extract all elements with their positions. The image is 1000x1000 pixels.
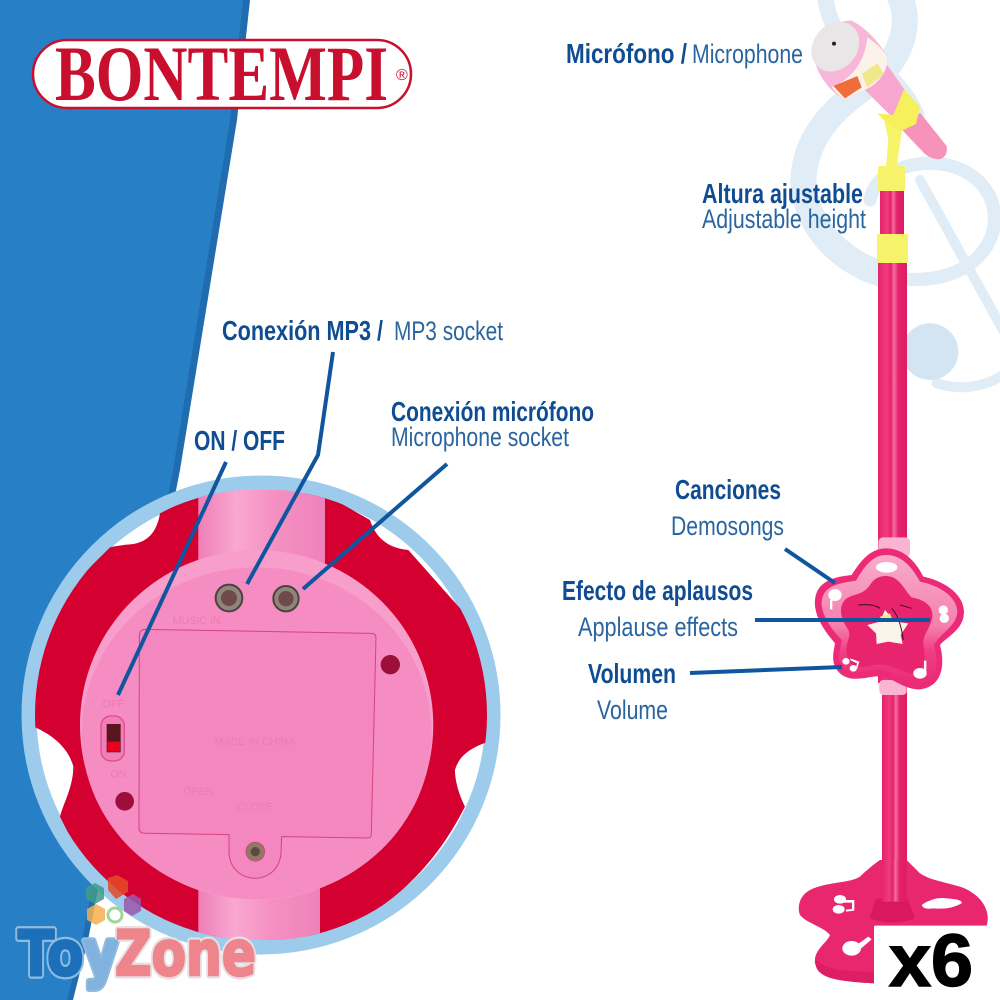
wordmark outline: Zone	[115, 917, 256, 990]
moulded marks: CLOSE	[237, 802, 273, 814]
callout: microphone	[566, 38, 803, 69]
callout: ON / OFF	[118, 425, 285, 695]
badge: x6: x6	[889, 919, 973, 1000]
head	[813, 21, 887, 99]
holder arm	[884, 118, 902, 167]
wordmark outline	[18, 917, 256, 990]
base shape	[799, 860, 988, 983]
moulded marks: MUSIC IN	[173, 615, 221, 627]
battery cover	[139, 629, 376, 878]
pole socket	[870, 897, 915, 922]
upper pole	[880, 188, 904, 236]
inset: product back	[20, 490, 500, 940]
yellow clip	[877, 89, 920, 131]
callout: volume	[588, 658, 842, 725]
lower pole	[878, 263, 907, 683]
callout: microphone socket	[303, 396, 594, 589]
callout: microphone socket: Microphone socket	[391, 422, 569, 452]
logo: Bontempi: BONTEMPI	[55, 30, 388, 117]
tab screw	[246, 842, 265, 861]
callout: microphone socket: Conexión micrófono	[391, 396, 594, 427]
background treble clef	[803, 0, 1000, 387]
callout: adjustable height: Adjustable height	[702, 204, 866, 234]
star ring	[822, 555, 957, 683]
mesh	[801, 12, 869, 81]
neck	[863, 63, 908, 117]
base note icons	[833, 895, 962, 956]
callout: MP3 socket	[222, 315, 503, 584]
star outer	[815, 548, 964, 689]
callout: applause effects: Applause effects	[578, 612, 738, 642]
label	[832, 37, 887, 99]
top cylinder	[198, 490, 325, 567]
callout: applause effects	[562, 575, 930, 642]
pink disc rim	[80, 550, 433, 900]
inset ring	[29, 483, 493, 947]
stand base	[799, 860, 988, 983]
callout: microphone: Micrófono /	[566, 38, 687, 69]
switch	[101, 716, 124, 761]
wordmark outline: Zone	[115, 917, 256, 990]
red star body	[20, 493, 500, 937]
wordmark outline: Toy	[18, 917, 118, 990]
moulded marks: OFF	[103, 698, 124, 710]
yellow collar upper	[878, 166, 905, 191]
logo: Bontempi: ®	[396, 67, 408, 84]
callout: demo songs	[671, 474, 835, 583]
badge: x6	[874, 919, 1000, 1000]
callout: adjustable height: Altura ajustable	[702, 178, 863, 209]
star centre	[867, 610, 908, 644]
callout: volume: Volumen	[588, 658, 676, 689]
star note icons	[828, 562, 949, 679]
callout: ON / OFF: ON / OFF	[194, 425, 285, 456]
blue background panel	[0, 0, 250, 1000]
wordmark outline: Toy	[18, 917, 118, 990]
base rim	[816, 960, 875, 983]
microphone	[801, 12, 947, 167]
callout: demo songs: Demosongs	[671, 511, 784, 541]
callout: microphone: Microphone	[692, 39, 803, 69]
callout: MP3 socket: Conexión MP3 /	[222, 315, 383, 346]
callout: MP3 socket: MP3 socket	[394, 316, 503, 346]
hexagon cluster	[86, 875, 141, 925]
moulded marks: OPEN	[183, 786, 213, 798]
callout: applause effects: Efecto de aplausos	[562, 575, 753, 606]
screw holes	[115, 655, 400, 811]
handle	[903, 113, 947, 159]
callout: demo songs: Canciones	[675, 474, 781, 505]
callout: volume: Volume	[597, 695, 668, 725]
control star	[815, 537, 964, 695]
socket: microphone	[273, 586, 299, 611]
socket: MP3	[216, 585, 242, 611]
yellow collar lower	[877, 234, 908, 263]
moulded marks	[103, 615, 296, 814]
callout: adjustable height	[702, 178, 866, 234]
inset: close-up of star back	[20, 483, 500, 947]
pole below star	[882, 685, 907, 905]
moulded marks: ON	[110, 768, 126, 780]
logo: ToyZone	[18, 875, 256, 990]
star inner	[841, 576, 932, 673]
moulded marks: MADE IN CHINA	[215, 736, 296, 748]
stand	[877, 166, 908, 905]
sleeves	[878, 537, 910, 557]
pink disc	[82, 567, 432, 899]
bottom cylinder	[198, 883, 320, 940]
